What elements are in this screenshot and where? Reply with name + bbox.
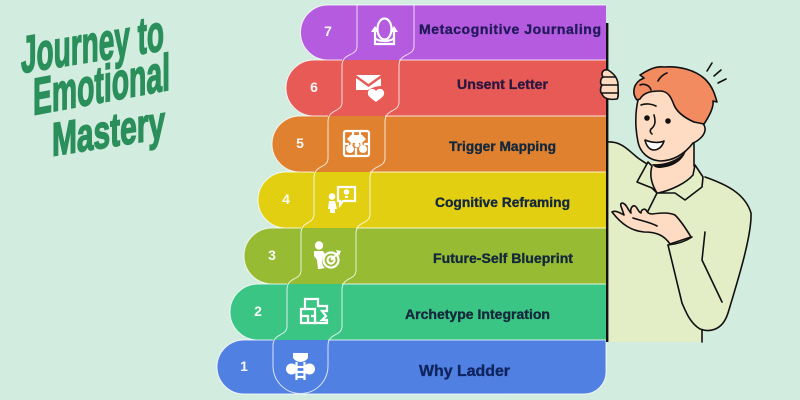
step numbers: 2 (254, 303, 262, 319)
person: hair (634, 67, 717, 124)
person: palm crease (633, 218, 657, 226)
icon: person with target (314, 241, 341, 269)
step 4 bar (258, 172, 606, 228)
label: Archetype Integration: Archetype Integration (405, 306, 550, 322)
icon: trigger map grid (344, 131, 369, 156)
step 2 bar (230, 284, 606, 340)
person: neck shadow (652, 151, 686, 168)
step 5 bar (272, 116, 606, 172)
label: Cognitive Reframing: Cognitive Reframing (435, 194, 570, 210)
connector outlines (217, 5, 606, 394)
step 1 bar (217, 340, 606, 394)
label: Unsent Letter: Unsent Letter (457, 76, 549, 92)
step numbers: 5 (296, 135, 304, 151)
icon: envelope with heart (356, 75, 384, 102)
icon: ladder with trophy (286, 353, 315, 380)
person: gripping hand (600, 70, 618, 99)
step numbers: 4 (282, 191, 290, 207)
label: Why Ladder: Why Ladder (419, 363, 510, 380)
step numbers (240, 23, 332, 374)
person: collar (637, 143, 703, 200)
person: cuff line (668, 237, 692, 245)
person: head (636, 90, 705, 161)
label: Future-Self Blueprint: Future-Self Blueprint (433, 250, 573, 266)
title (21, 4, 170, 167)
title: Emotional (33, 44, 170, 127)
icon: mirror (371, 18, 398, 44)
person: shirt outline (608, 142, 751, 342)
person: shirt body (608, 142, 751, 342)
title: Mastery (52, 96, 165, 167)
step numbers: 1 (240, 358, 248, 374)
step 3 bar (244, 228, 606, 284)
person: black edge line (606, 23, 608, 342)
step numbers: 6 (310, 79, 318, 95)
person: hair detail (640, 73, 667, 90)
person: hand under chin (612, 203, 691, 244)
step 7 bar (301, 5, 606, 60)
label: Metacognitive Journaling: Metacognitive Journaling (419, 21, 601, 37)
step numbers: 3 (268, 247, 276, 263)
person: smile (645, 140, 664, 150)
person: emphasis marks (707, 63, 726, 83)
person: eyes and nose (641, 104, 671, 134)
icon: person with idea speech bubble (328, 187, 355, 213)
step numbers: 7 (324, 23, 332, 39)
step 6 bar (286, 60, 606, 116)
person: neck (649, 146, 694, 193)
label: Trigger Mapping: Trigger Mapping (449, 138, 556, 154)
icon: puzzle archetype pieces (301, 299, 327, 323)
